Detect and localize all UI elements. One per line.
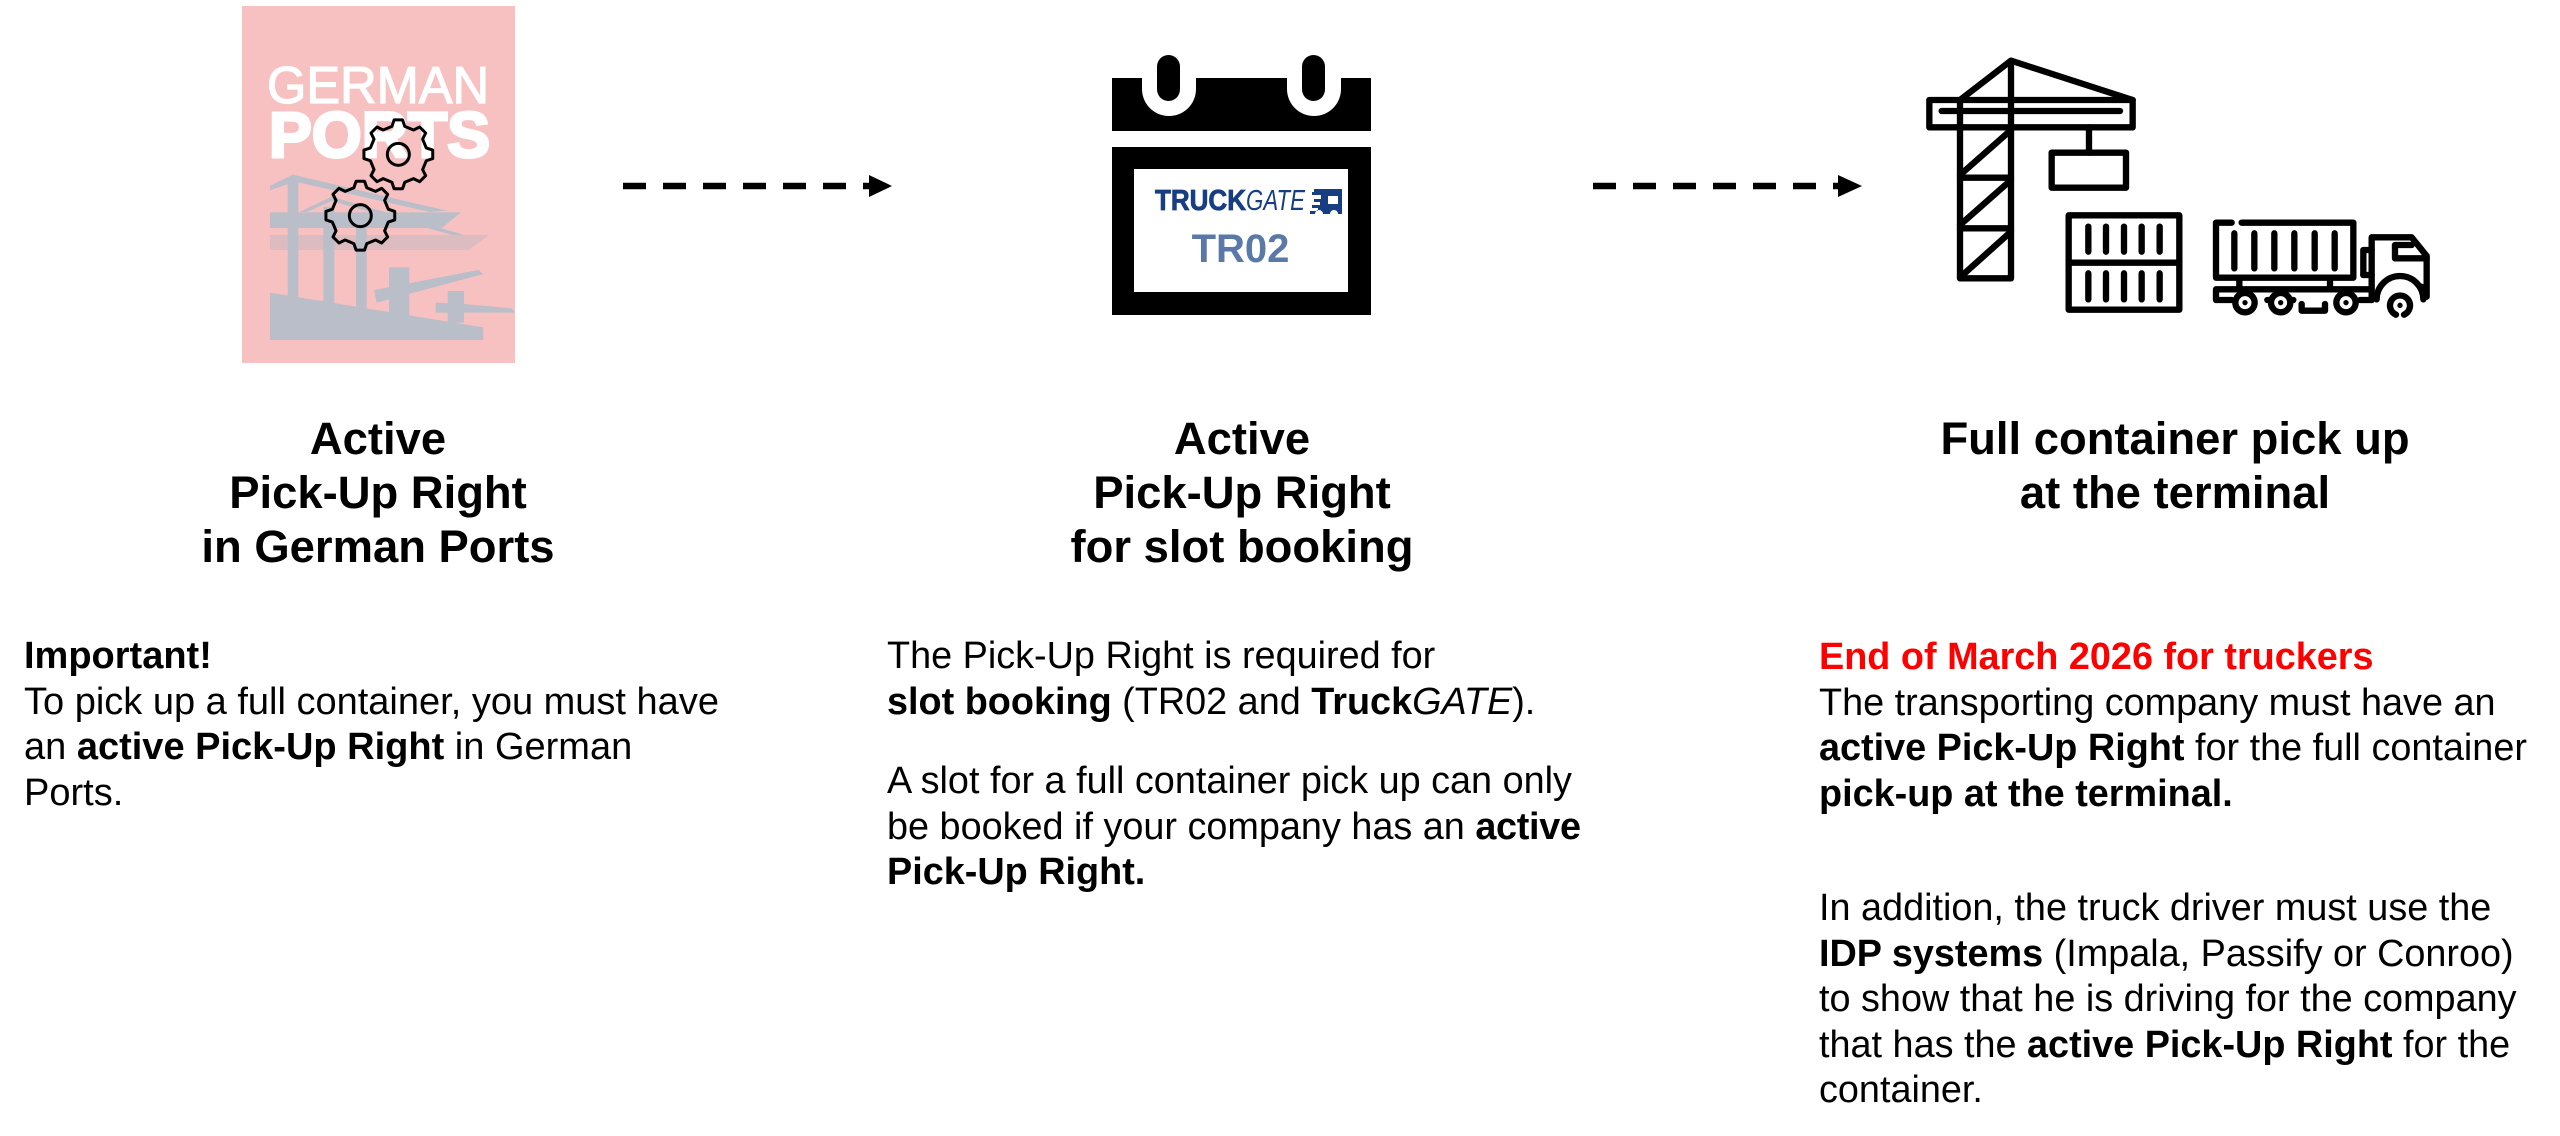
text block: transporting company requirement: End of March 2026 for truckers: [1819, 636, 2374, 678]
text block: slot booking requirement: [887, 635, 1535, 723]
text block: important note: an active Pick-Up Right in German: [24, 726, 632, 768]
calendar body: [1112, 147, 1371, 315]
panel: active pick-up right in German Ports: [24, 6, 719, 814]
stacked containers: [2069, 215, 2179, 310]
text block: active right needed for slot: A slot for a full container pick up can only: [887, 760, 1572, 802]
TruckGate logo: GATE: [1246, 185, 1305, 217]
logo wordmark: PORTS: [269, 99, 490, 171]
TruckGate logo: TRUCK: [1155, 185, 1246, 217]
text block: transporting company requirement: [1819, 636, 2527, 815]
text block: IDP systems requirement: [1819, 887, 2517, 1111]
text block: IDP systems requirement: to show that he is driving for the company: [1819, 978, 2517, 1020]
text block: slot booking requirement: The Pick-Up Right is required for: [887, 635, 1435, 677]
text block: active right needed for slot: be booked if your company has an active: [887, 806, 1581, 848]
logo background: [242, 6, 515, 363]
heading: active pick-up right for slot booking: for slot booking: [1071, 521, 1413, 572]
heading: full container pick up at the terminal: [1940, 413, 2410, 518]
heading: active pick-up right for slot booking: [1071, 413, 1413, 572]
crane: [1929, 61, 2133, 278]
text block: important note: To pick up a full container, you must have: [24, 681, 719, 723]
panel: active pick-up right for slot booking: [887, 55, 1581, 893]
heading: full container pick up at the terminal: Full container pick up: [1940, 413, 2410, 464]
heading: active pick-up right for slot booking: Active: [1174, 413, 1310, 464]
text block: active right needed for slot: [887, 760, 1581, 893]
heading: full container pick up at the terminal: at the terminal: [2020, 467, 2330, 518]
text block: transporting company requirement: pick-up at the terminal.: [1819, 773, 2233, 815]
heading: active pick-up right in German Ports: Active: [310, 413, 446, 464]
calendar header: [1112, 78, 1371, 131]
text block: IDP systems requirement: In addition, the truck driver must use the: [1819, 887, 2491, 929]
text block: IDP systems requirement: container.: [1819, 1069, 1983, 1111]
text block: important note: Important!: [24, 635, 212, 677]
text block: IDP systems requirement: that has the active Pick-Up Right for the: [1819, 1024, 2510, 1066]
arrow: step two to step three: [1593, 175, 1862, 197]
crane load: [2079, 127, 2098, 153]
gears: [326, 120, 433, 250]
heading: active pick-up right in German Ports: in German Ports: [201, 521, 555, 572]
text block: important note: [24, 635, 719, 814]
panel: full container pick up at the terminal: [1819, 58, 2527, 1111]
container truck: [2216, 223, 2427, 315]
heading: active pick-up right in German Ports: [201, 413, 555, 572]
text block: slot booking requirement: slot booking (TR02 and TruckGATE).: [887, 681, 1535, 723]
heading: active pick-up right in German Ports: Pick-Up Right: [229, 467, 527, 518]
arrow: step one to step two: [623, 175, 892, 197]
icon: German Ports logo with gears: [242, 6, 515, 363]
calendar rings: [1157, 55, 1325, 101]
port silhouette: [270, 175, 515, 340]
icon: calendar with TruckGate TR02: [1112, 55, 1371, 315]
heading: active pick-up right for slot booking: Pick-Up Right: [1093, 467, 1391, 518]
icon: crane, containers and truck: [1926, 58, 2430, 318]
text block: transporting company requirement: The transporting company must have an: [1819, 682, 2496, 724]
text block: IDP systems requirement: IDP systems (Impala, Passify or Conroo): [1819, 933, 2514, 975]
logo wordmark: GERMAN: [267, 57, 489, 115]
text block: transporting company requirement: active Pick-Up Right for the full container: [1819, 727, 2527, 769]
TruckGate logo: [1155, 185, 1342, 217]
TR02 label: TR02: [1192, 227, 1289, 271]
logo wordmark: [267, 57, 490, 171]
text block: important note: Ports.: [24, 772, 123, 814]
text block: active right needed for slot: Pick-Up Right.: [887, 851, 1145, 893]
